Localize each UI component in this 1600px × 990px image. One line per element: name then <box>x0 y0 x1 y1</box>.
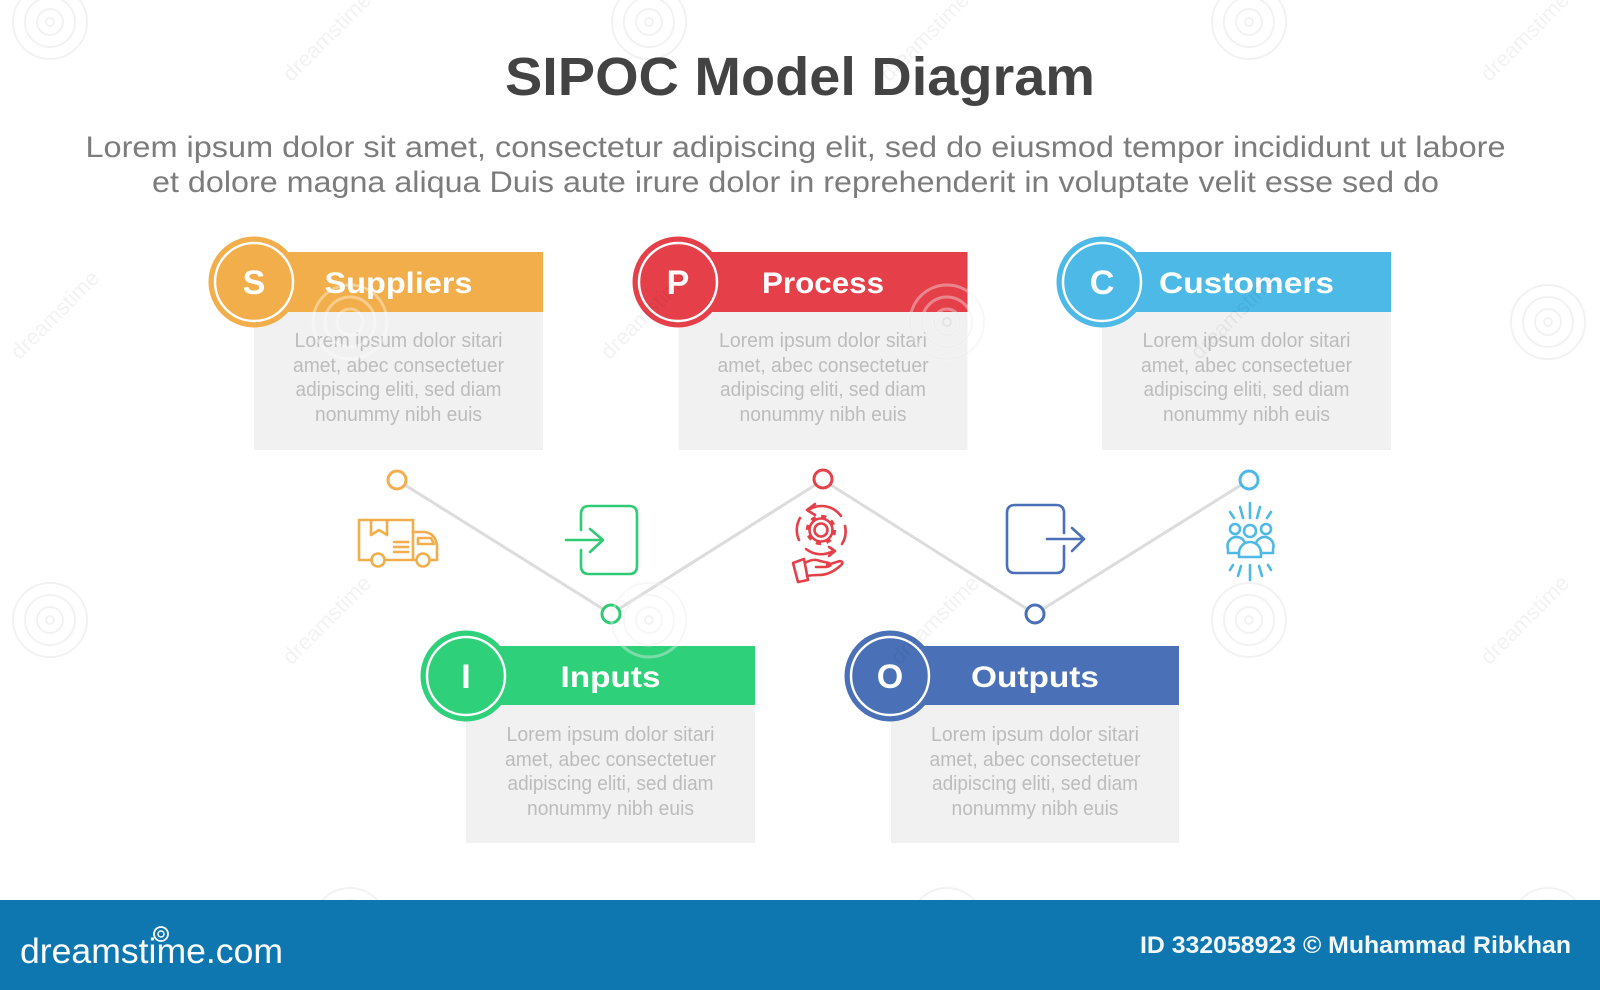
node: customers <box>1240 471 1258 489</box>
panel: inputs <box>420 630 755 843</box>
watermark: dreamstime spirals and text: dreamstime <box>1185 265 1284 364</box>
zigzag connector line <box>397 480 1249 614</box>
panel: suppliers: adipiscing eliti, sed diam <box>296 379 502 401</box>
panel: inputs: I <box>461 658 471 696</box>
node: inputs <box>602 605 620 623</box>
panel: customers: amet, abec consectetuer <box>1141 355 1352 377</box>
icon: delivery truck <box>359 520 437 566</box>
panel: suppliers: amet, abec consectetuer <box>293 355 504 377</box>
icon: input arrow <box>566 506 637 574</box>
node: process <box>814 470 832 488</box>
panel: suppliers: Suppliers <box>324 267 472 300</box>
panel: outputs: amet, abec consectetuer <box>930 749 1141 771</box>
panel: process: amet, abec consectetuer <box>718 355 929 377</box>
panel: outputs: Lorem ipsum dolor sitari <box>931 724 1139 746</box>
icon: gear in cycle over hand <box>793 504 846 582</box>
panel: customers <box>1056 236 1391 450</box>
panel: customers: Customers <box>1159 267 1334 300</box>
subtitle text <box>86 131 1506 199</box>
watermark: dreamstime spirals and text: dreamstime <box>5 265 104 364</box>
panel: process: Process <box>762 267 884 300</box>
watermark: dreamstime spirals and text: dreamstime <box>277 570 376 669</box>
watermark: dreamstime spirals and text: dreamstime <box>1475 570 1574 669</box>
panel: inputs: amet, abec consectetuer <box>505 749 716 771</box>
image id and author credit: ID 332058923 © Muhammad Ribkhan <box>1140 932 1571 959</box>
panel: outputs <box>844 630 1179 843</box>
node: outputs <box>1026 605 1044 623</box>
panel: customers: Lorem ipsum dolor sitari <box>1142 330 1350 352</box>
subtitle text: Lorem ipsum dolor sit amet, consectetur adipiscing elit, sed do eiusmod tempor incididunt ut labore <box>86 131 1506 164</box>
panel: suppliers: nonummy nibh euis <box>315 404 482 426</box>
panel: outputs: Outputs <box>971 661 1099 694</box>
panel: inputs: Inputs <box>560 661 660 694</box>
panel: suppliers <box>208 236 543 450</box>
icon: customers group <box>1227 503 1274 580</box>
panel: process: nonummy nibh euis <box>740 404 906 426</box>
panel: inputs: adipiscing eliti, sed diam <box>508 773 714 795</box>
panel: customers: nonummy nibh euis <box>1163 404 1330 426</box>
panel: outputs: O <box>877 658 903 696</box>
panel: customers: adipiscing eliti, sed diam <box>1144 379 1350 401</box>
panel: process: Lorem ipsum dolor sitari <box>719 330 927 352</box>
panel: inputs: nonummy nibh euis <box>527 798 694 820</box>
panel: inputs: Lorem ipsum dolor sitari <box>506 724 714 746</box>
panel: outputs: adipiscing eliti, sed diam <box>932 773 1138 795</box>
panel: process <box>632 236 968 450</box>
panel: outputs: nonummy nibh euis <box>952 798 1118 820</box>
subtitle text: et dolore magna aliqua Duis aute irure dolor in reprehenderit in voluptate velit esse sed do <box>152 166 1439 199</box>
panel: process: P <box>667 264 689 302</box>
panel: suppliers: Lorem ipsum dolor sitari <box>294 330 502 352</box>
icon: output arrow <box>1007 505 1084 573</box>
watermark: dreamstime spirals and text: dreamstime <box>885 570 984 669</box>
footer banner <box>0 900 1600 990</box>
watermark: dreamstime spirals and text: dreamstime <box>595 265 694 364</box>
title: SIPOC Model Diagram <box>505 47 1095 107</box>
panel: suppliers: S <box>243 264 265 302</box>
panel: process: adipiscing eliti, sed diam <box>720 379 926 401</box>
panel: customers: C <box>1090 264 1114 302</box>
dreamstime logo: dreamstime.com <box>20 932 283 971</box>
node: suppliers <box>388 471 406 489</box>
